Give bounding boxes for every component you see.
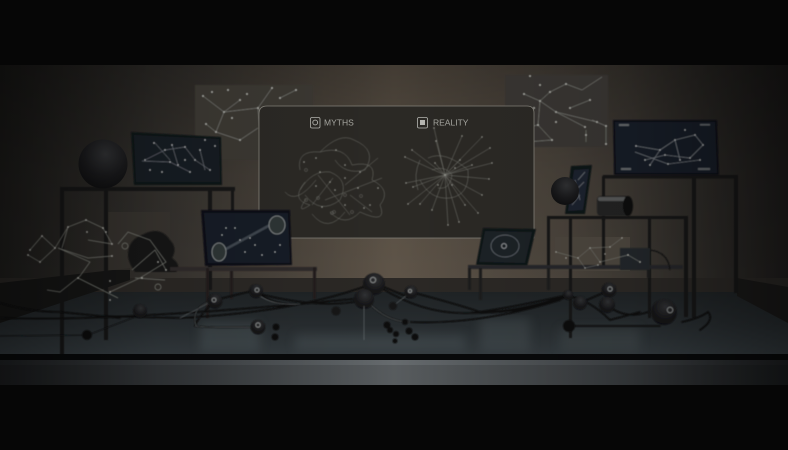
small poster behind left table (108, 212, 170, 270)
monitor right (613, 120, 719, 175)
tablet center right (476, 228, 536, 267)
sphere right (551, 177, 579, 205)
low table right (468, 265, 683, 300)
glass front edge (0, 354, 788, 450)
dark object behind left network (128, 231, 178, 272)
low table left (170, 267, 317, 318)
right table top (602, 175, 738, 318)
side vignette (0, 65, 788, 385)
floating network left (28, 220, 166, 300)
right shelf middle (547, 216, 688, 338)
floor reflections (200, 318, 640, 352)
myths label: MYTHS (324, 118, 354, 128)
cable nodes (82, 273, 677, 344)
cables (0, 283, 710, 336)
poster: right network (505, 75, 608, 147)
poster: left network (195, 85, 313, 160)
panel: myths and reality (259, 106, 534, 238)
reality radial network (405, 128, 492, 225)
small device and network right (556, 238, 670, 270)
monitor left (131, 132, 222, 185)
cylinder right (597, 196, 633, 216)
tablet small upright (565, 165, 592, 214)
sphere left (78, 140, 128, 188)
myths tangled network (285, 138, 384, 224)
myths label (310, 118, 354, 128)
left shelf (60, 187, 235, 355)
reality label: REALITY (433, 118, 469, 128)
small poster behind right table (555, 237, 630, 271)
reality label (418, 118, 469, 128)
tablet center left (201, 210, 292, 266)
